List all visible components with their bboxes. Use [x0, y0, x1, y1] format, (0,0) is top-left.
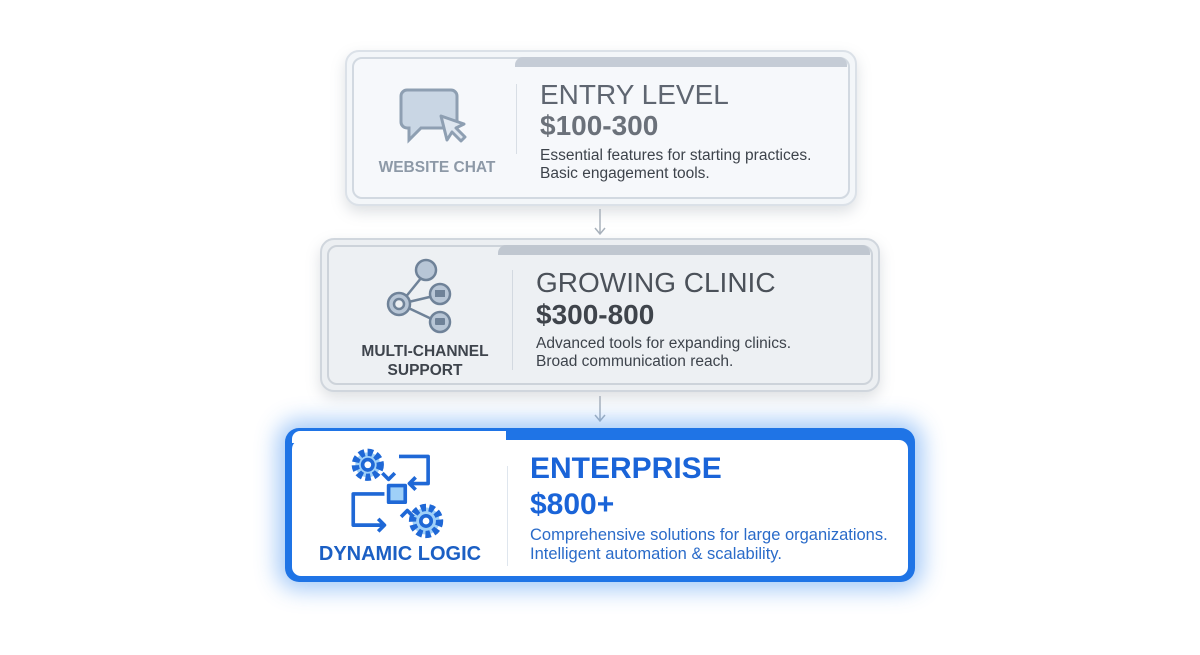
tab bar: [515, 57, 847, 67]
description: [530, 526, 888, 563]
description: Essential features for starting practices.: [540, 147, 811, 164]
icon: chat with cursor: [400, 88, 466, 144]
tab notch: [292, 431, 506, 443]
label: multi-channel support: SUPPORT: [388, 362, 462, 379]
arrow 2: [594, 396, 606, 422]
price: $800+: [530, 488, 614, 521]
inner frame: [327, 245, 873, 385]
arrow 1: [594, 209, 606, 235]
tab bar: [498, 245, 870, 255]
description: [536, 335, 791, 370]
description: Broad communication reach.: [536, 353, 733, 370]
label: website chat: WEBSITE CHAT: [379, 159, 495, 176]
description: Comprehensive solutions for large organizations.: [530, 526, 888, 544]
description: Basic engagement tools.: [540, 165, 710, 182]
inner frame: [352, 57, 850, 199]
price: $300-800: [536, 299, 654, 330]
title: ENTRY LEVEL: [540, 79, 729, 110]
title: GROWING CLINIC: [536, 267, 776, 298]
card: entry level: [345, 50, 857, 206]
description: [540, 147, 811, 182]
price: $100-300: [540, 110, 658, 141]
card: growing clinic: [320, 238, 880, 392]
icon: dynamic logic gears: [351, 448, 444, 538]
label: multi-channel support: [361, 343, 489, 379]
card: enterprise: [285, 428, 915, 582]
label: multi-channel support: MULTI-CHANNEL: [361, 343, 489, 360]
label: dynamic logic: DYNAMIC LOGIC: [319, 543, 481, 565]
title: ENTERPRISE: [530, 452, 722, 485]
icon: multi-channel network: [386, 258, 452, 334]
inner panel: [292, 440, 908, 576]
description: Advanced tools for expanding clinics.: [536, 335, 791, 352]
description: Intelligent automation & scalability.: [530, 545, 782, 563]
